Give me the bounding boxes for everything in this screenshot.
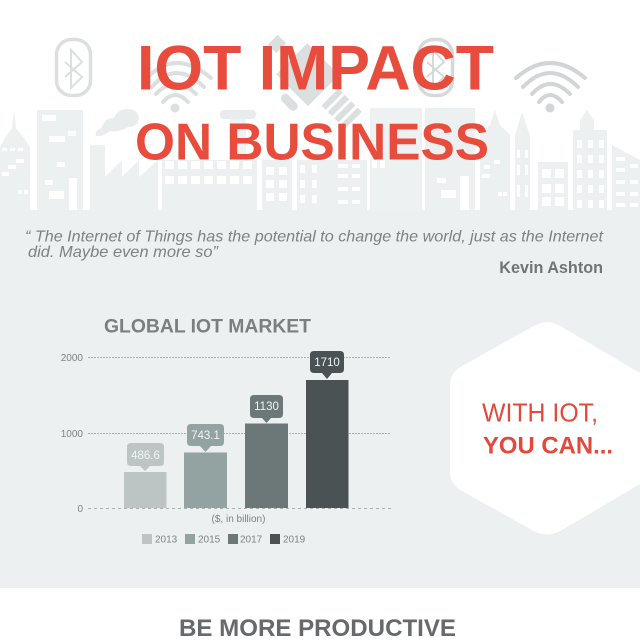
chart unit label: ($, in billion) xyxy=(212,514,265,525)
bar 2013: 486.6 xyxy=(131,450,160,462)
hexagon callout: YOU CAN... xyxy=(483,432,613,460)
chart legend: 2017 xyxy=(240,534,263,546)
chart legend: 2013 xyxy=(155,534,178,546)
quote: “ The Internet of Things has the potential to change the world, just as the Internet xyxy=(25,228,604,246)
icon: wifi center xyxy=(147,63,211,110)
bar 2015: 743.1 xyxy=(191,430,220,442)
bar 2017 xyxy=(245,395,288,508)
y axis xyxy=(61,353,83,515)
chart heading: GLOBAL IOT MARKET xyxy=(104,316,311,338)
y axis: 1000 xyxy=(61,429,83,440)
chart legend xyxy=(142,534,306,546)
grid lines xyxy=(88,358,391,508)
icon: wifi right xyxy=(516,63,585,110)
icon: bluetooth right xyxy=(418,40,452,96)
chart legend: 2019 xyxy=(283,534,306,546)
title: ON BUSINESS xyxy=(135,112,489,170)
quote: did. Maybe even more so” xyxy=(28,244,219,261)
icon: satellite xyxy=(247,24,369,146)
callout text: WITH IOT, xyxy=(482,400,598,428)
y axis: 2000 xyxy=(61,353,83,364)
bar 2019 xyxy=(306,351,348,508)
hexagon callout xyxy=(450,322,640,534)
title: IOT IMPACT xyxy=(137,34,494,104)
quote author: Kevin Ashton xyxy=(499,259,603,277)
y axis: 0 xyxy=(77,504,83,515)
title xyxy=(135,34,494,170)
bar 2019: 1710 xyxy=(314,357,340,369)
icon: bluetooth left xyxy=(56,40,90,96)
background band xyxy=(0,210,640,588)
bar chart xyxy=(61,351,391,515)
skyline illustration xyxy=(0,108,640,210)
bar 2015 xyxy=(184,424,227,508)
bar 2013 xyxy=(124,443,166,508)
chart legend: 2015 xyxy=(198,534,221,546)
bar 2017: 1130 xyxy=(254,401,279,413)
quote xyxy=(25,228,604,261)
